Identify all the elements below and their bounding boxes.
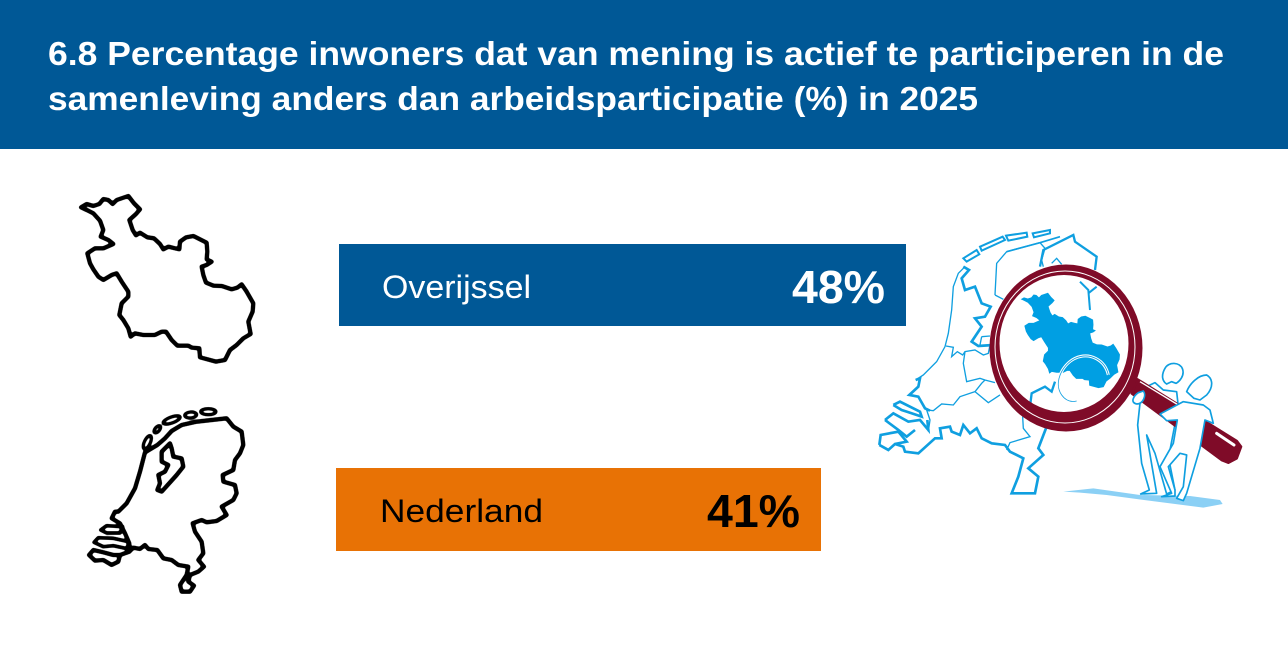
header banner — [0, 0, 1288, 149]
bar: Overijssel 48%: 48% — [792, 261, 885, 313]
illustration: magnifying glass over map with two people — [879, 230, 1241, 508]
bar: Overijssel 48% — [339, 244, 906, 326]
person: back figure — [1138, 363, 1183, 494]
bar: Nederland 41%: Nederland — [380, 493, 543, 529]
map inside lens — [1030, 258, 1097, 407]
lens — [990, 258, 1241, 463]
ground shadow — [1063, 488, 1223, 508]
Overijssel highlighted — [1021, 293, 1120, 388]
icon: Overijssel outline — [81, 196, 253, 362]
lens handle — [1132, 379, 1241, 463]
map of the Netherlands — [879, 230, 1060, 493]
title — [48, 35, 1224, 117]
lens ring — [990, 265, 1142, 432]
bar: Nederland 41% — [336, 468, 821, 551]
bar: Nederland 41%: 41% — [707, 485, 800, 537]
title: samenleving anders dan arbeidsparticipatie (%) in 2025 — [48, 80, 978, 117]
lens reflection — [1058, 356, 1108, 401]
person hand on handle — [1133, 391, 1145, 404]
title: 6.8 Percentage inwoners dat van mening is actief te participeren in de — [48, 35, 1224, 72]
bar: Overijssel 48%: Overijssel — [382, 269, 531, 305]
person: front figure — [1160, 375, 1213, 501]
map north-east part — [1040, 235, 1097, 270]
icon: Netherlands outline — [89, 409, 243, 592]
